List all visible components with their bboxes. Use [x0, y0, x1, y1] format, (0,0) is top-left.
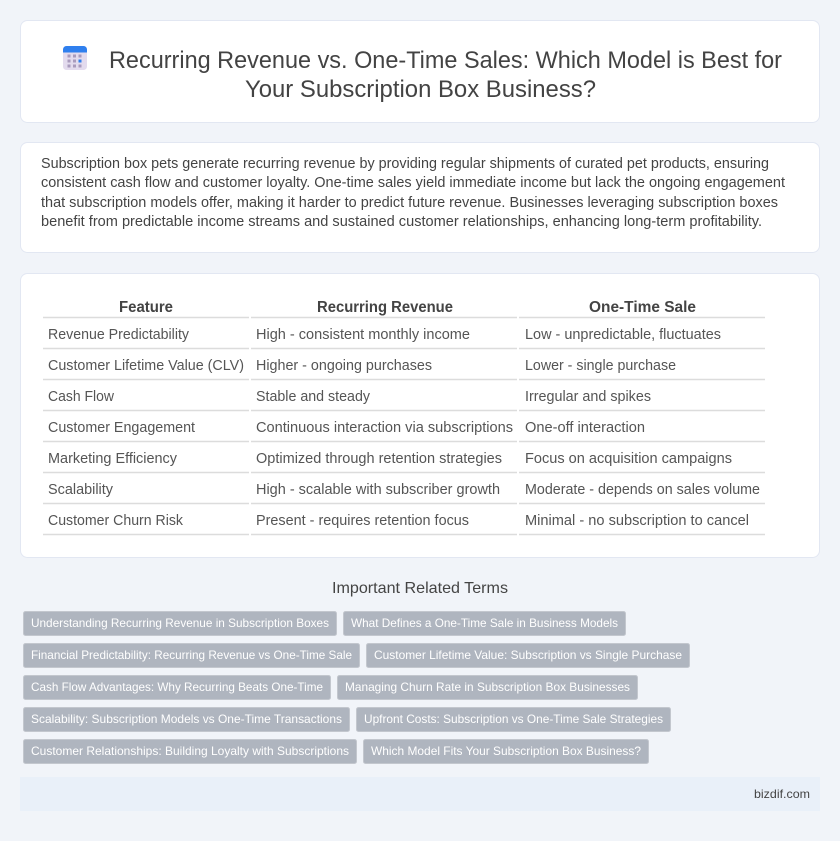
tag	[344, 612, 626, 636]
panel: comparison table	[20, 274, 820, 558]
row: cash flow	[43, 389, 765, 410]
table header	[43, 299, 765, 318]
footer: site name: bizdif.com	[754, 787, 810, 801]
row: cash flow: Irregular and spikes	[525, 389, 651, 405]
heading: important related terms: Important Related Terms	[332, 580, 508, 597]
row: customer lifetime value: Higher - ongoing purchases	[256, 358, 432, 374]
row: customer engagement: Customer Engagement	[48, 420, 195, 436]
row: customer churn risk: Present - requires retention focus	[256, 513, 469, 529]
row: customer engagement: One-off interaction	[525, 420, 645, 436]
row: customer lifetime value: Customer Lifetime Value (CLV)	[48, 358, 244, 374]
tag	[24, 708, 350, 732]
tag	[364, 740, 648, 764]
tag	[356, 708, 670, 732]
text block: intro: Subscription box pets generate recurring revenue by providing regular shipments of curated pet products, ensuring	[41, 156, 769, 172]
row: scalability	[43, 482, 765, 504]
row: marketing efficiency: Marketing Efficiency	[48, 451, 178, 467]
tags: related terms	[24, 612, 690, 764]
row: scalability: High - scalable with subscriber growth	[256, 482, 500, 498]
panel: intro paragraph	[20, 142, 820, 252]
row: revenue predictability	[43, 327, 765, 348]
tag: What Defines a One-Time Sale in Business Models	[351, 616, 618, 630]
table header: Feature	[119, 299, 173, 316]
row: scalability: Moderate - depends on sales volume	[525, 482, 760, 498]
row: customer engagement	[43, 420, 765, 442]
row: customer churn risk: Customer Churn Risk	[48, 513, 184, 529]
row: scalability: Scalability	[48, 482, 114, 498]
text block: intro	[41, 156, 785, 230]
tag	[338, 676, 638, 700]
tag: Upfront Costs: Subscription vs One-Time Sale Strategies	[364, 712, 663, 726]
tag	[24, 740, 356, 764]
text block: intro: that subscription models offer, making it harder to predict future revenue. Businesses leveraging subscription boxes	[41, 195, 778, 211]
tag: Scalability: Subscription Models vs One-Time Transactions	[31, 712, 342, 726]
row: customer churn risk	[43, 513, 765, 534]
tag: Financial Predictability: Recurring Revenue vs One-Time Sale	[31, 648, 352, 662]
footer	[20, 777, 820, 811]
tag: Cash Flow Advantages: Why Recurring Beats One-Time	[31, 680, 323, 694]
icon: calendar	[63, 46, 87, 70]
title: Recurring Revenue vs. One-Time Sales: Which Model is Best for	[109, 47, 782, 74]
text block: intro: consistent cash flow and customer loyalty. One-time sales yield immediate income but lack the ongoing engagement	[41, 175, 785, 191]
tag: Customer Lifetime Value: Subscription vs Single Purchase	[374, 648, 682, 662]
table header: Recurring Revenue	[317, 299, 453, 316]
text block: intro: benefit from predictable income streams and sustained customer relationships, enhancing long-term profitability.	[41, 214, 762, 230]
tag	[366, 644, 690, 668]
panel: header	[20, 20, 820, 122]
row: customer lifetime value: Lower - single purchase	[525, 358, 676, 374]
table header: One-Time Sale	[589, 299, 696, 316]
tag	[24, 676, 330, 700]
title	[109, 47, 782, 103]
row: customer engagement: Continuous interaction via subscriptions	[256, 420, 513, 436]
row: revenue predictability: Revenue Predictability	[48, 327, 190, 343]
row: marketing efficiency: Optimized through retention strategies	[256, 451, 502, 467]
tag: Which Model Fits Your Subscription Box Business?	[371, 744, 641, 758]
row: customer lifetime value	[43, 358, 765, 380]
tag: Understanding Recurring Revenue in Subscription Boxes	[31, 616, 329, 630]
tag	[24, 644, 360, 668]
row: customer churn risk: Minimal - no subscription to cancel	[525, 513, 749, 529]
row: marketing efficiency: Focus on acquisition campaigns	[525, 451, 732, 467]
row: revenue predictability: Low - unpredictable, fluctuates	[525, 327, 721, 343]
row: cash flow: Stable and steady	[256, 389, 371, 405]
row: marketing efficiency	[43, 451, 765, 472]
row: revenue predictability: High - consistent monthly income	[256, 327, 470, 343]
row: cash flow: Cash Flow	[48, 389, 115, 405]
tag: Managing Churn Rate in Subscription Box Businesses	[345, 680, 630, 694]
tag: Customer Relationships: Building Loyalty with Subscriptions	[31, 744, 349, 758]
tag	[24, 612, 336, 636]
title: Your Subscription Box Business?	[245, 76, 596, 103]
